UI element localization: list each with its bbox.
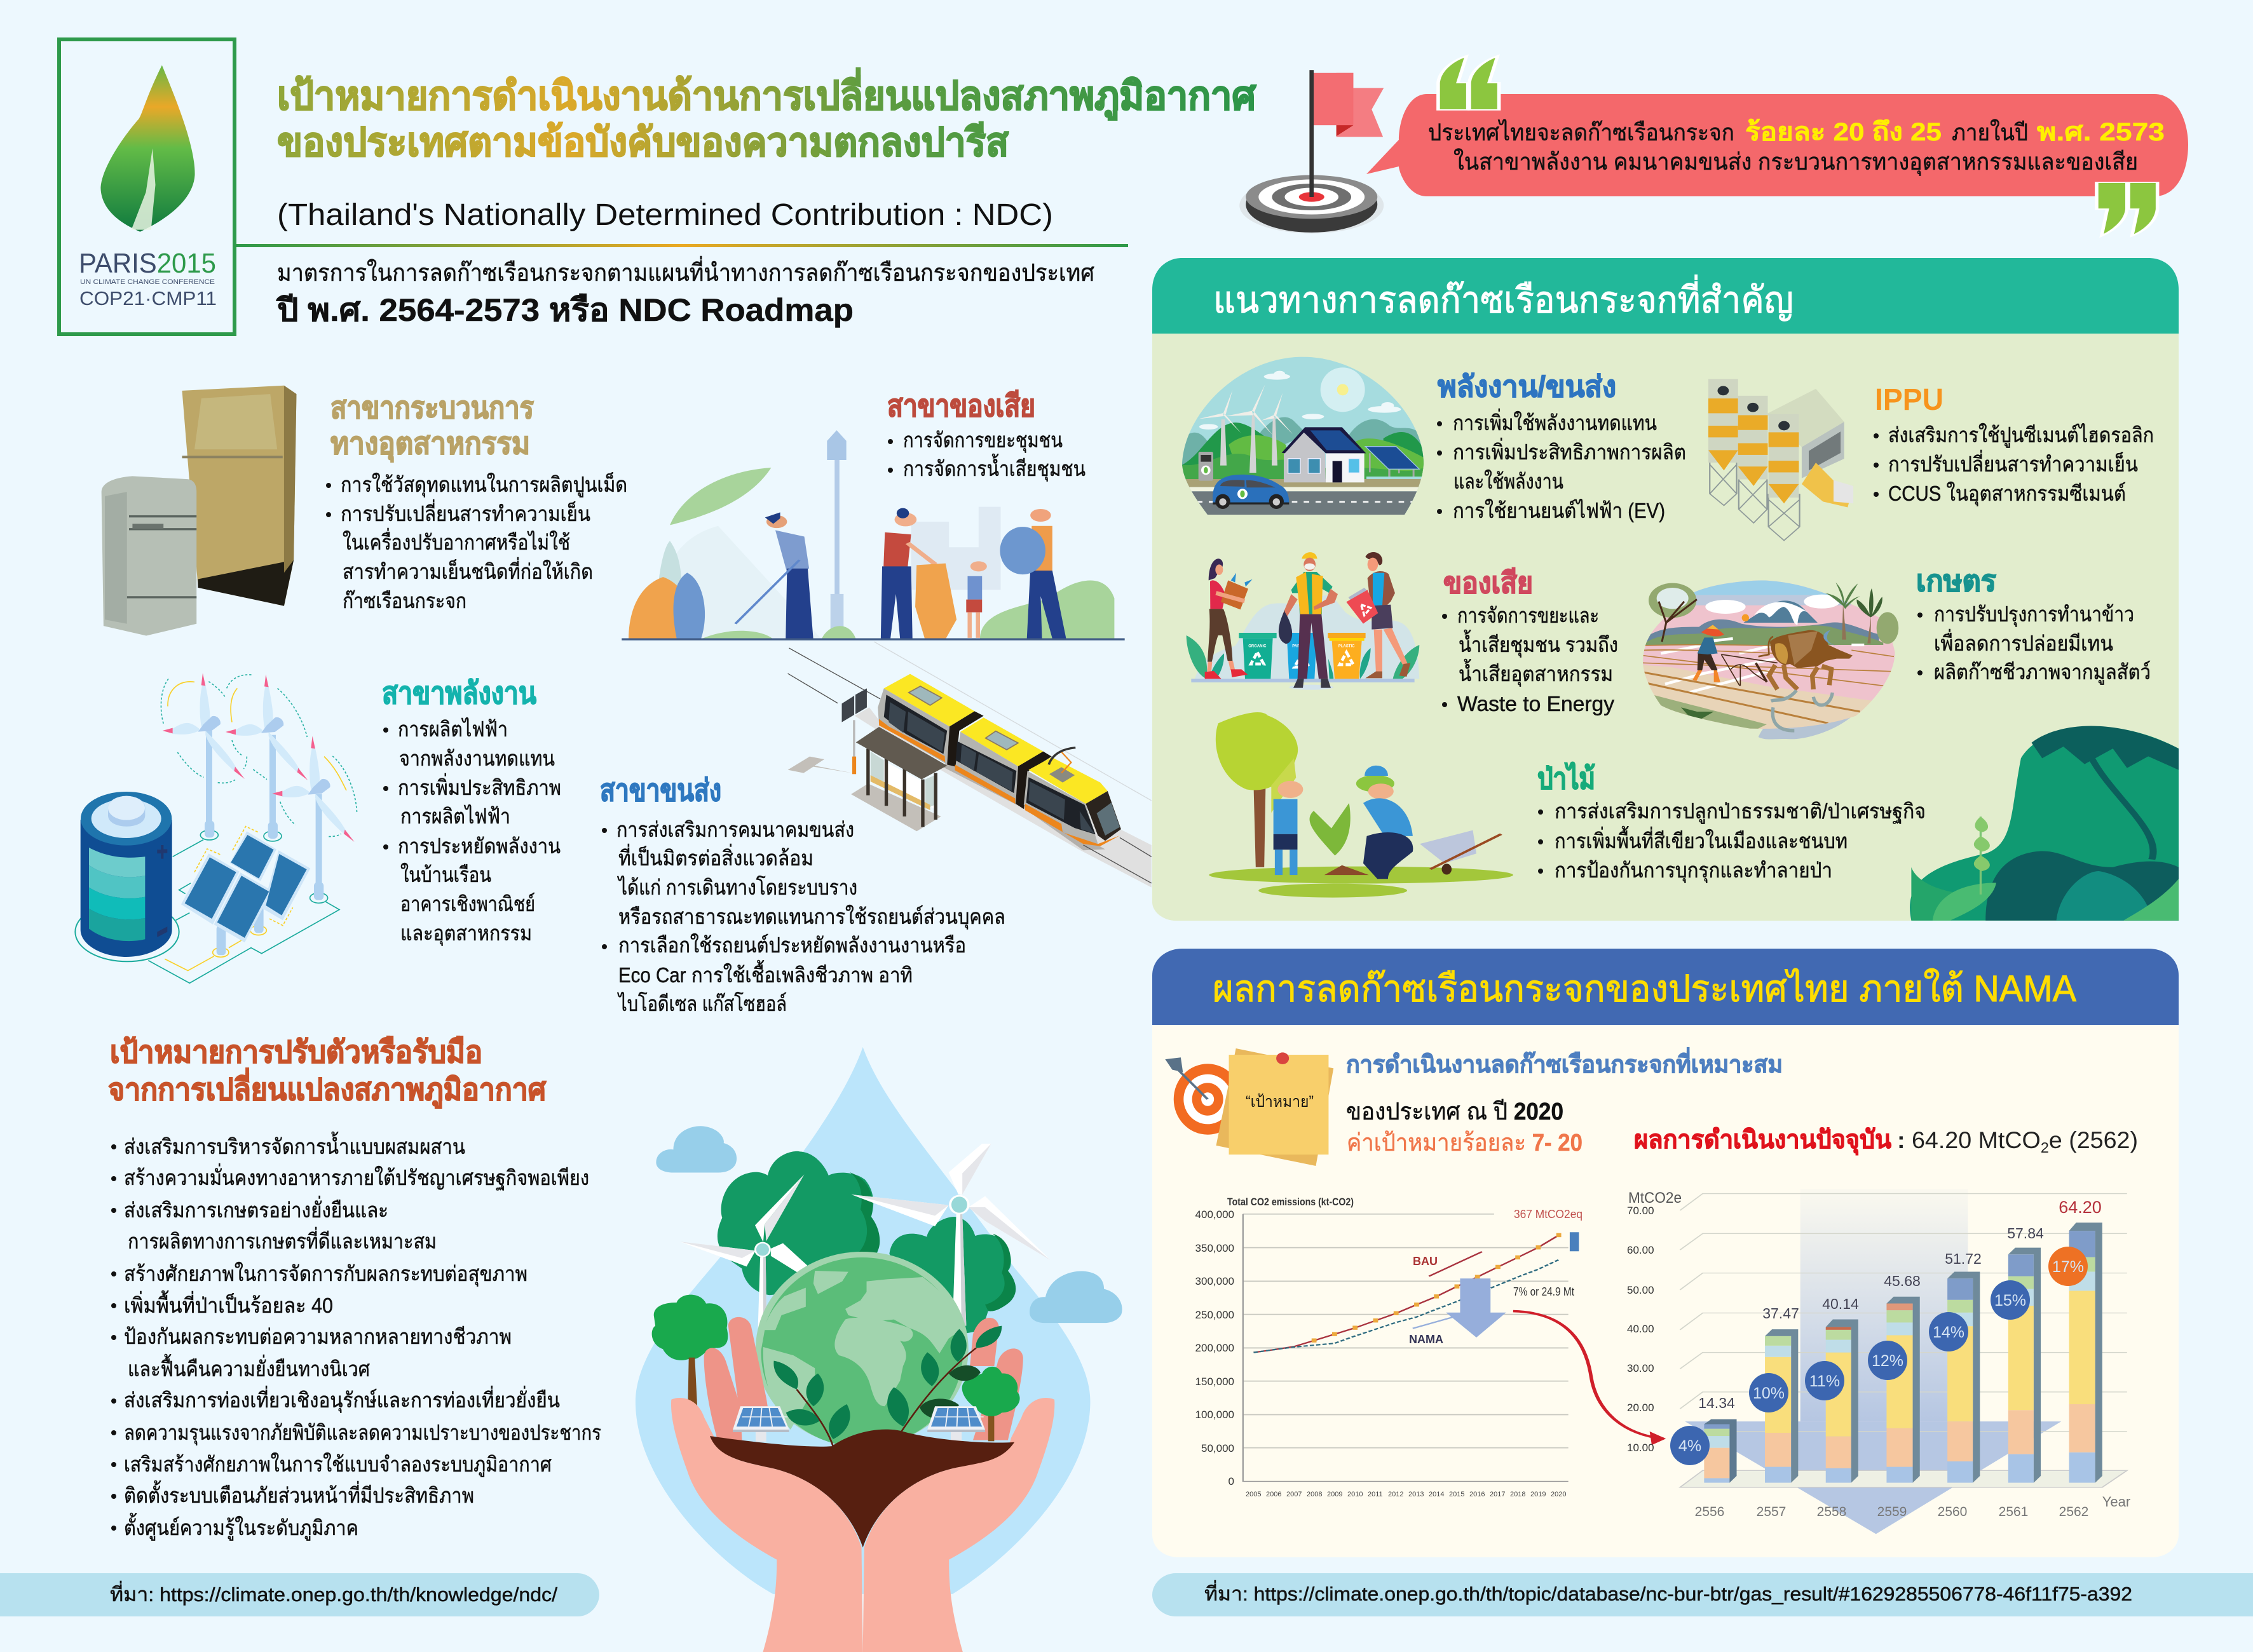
quote text — [1428, 118, 2165, 176]
axis and value labels: 40.14 — [1822, 1296, 1859, 1312]
line chart: total CO2 emissions: 367 MtCO2eq — [1514, 1208, 1583, 1221]
heading: สาขาขนส่ง — [600, 774, 721, 808]
line chart: total CO2 emissions: 250,000 — [1195, 1309, 1234, 1321]
current performance: ผลการดำเนินงานปัจจุบัน — [1634, 1126, 1891, 1156]
quote text: ในสาขาพลังงาน คมนาคมขนส่ง กระบวนการทางอุตสาหกรรมและของเสีย — [1453, 148, 2138, 176]
bullet list: การใช้ยานยนต์ไฟฟ้า (EV) — [1453, 499, 1665, 522]
axis and value labels: 51.72 — [1945, 1250, 1982, 1267]
axis and value labels: 37.47 — [1762, 1305, 1799, 1322]
bullet list: ผลิตก๊าซชีวภาพจากมูลสัตว์ — [1934, 660, 2151, 685]
line chart: total CO2 emissions: 2007 — [1286, 1491, 1302, 1498]
panel: energy — [75, 673, 561, 983]
bullet list: การส่งเสริมการคมนาคมขนส่ง — [616, 818, 854, 841]
icon: leaf with Eiffel tower — [100, 65, 195, 232]
axis and value labels: 70.00 — [1627, 1205, 1654, 1217]
heading: IPPU: IPPU — [1875, 383, 1943, 417]
line chart: total CO2 emissions: 2008 — [1307, 1491, 1322, 1498]
bullet list — [1874, 423, 2154, 506]
percent badges: 14% — [1933, 1324, 1964, 1341]
bullet list: Waste to Energy — [1457, 692, 1615, 715]
axis and value labels: 50.00 — [1627, 1284, 1654, 1296]
bullet list — [888, 428, 1086, 482]
bullet list: ส่งเสริมการเกษตรอย่างยั่งยืนและ — [124, 1196, 388, 1222]
axis and value labels: 45.68 — [1884, 1273, 1921, 1289]
bullet list: การประหยัดพลังงาน — [398, 834, 561, 858]
target text: ของประเทศ ณ ปี 2020 — [1346, 1099, 1563, 1125]
axis and value labels: 2560 — [1938, 1505, 1967, 1519]
main title — [277, 68, 1257, 165]
bullet list: ส่งเสริมการบริหารจัดการน้ำแบบผสมผสาน — [124, 1132, 465, 1158]
bullet list: น้ำเสียอุตสาหกรรม — [1459, 659, 1613, 687]
line chart: total CO2 emissions — [1195, 1196, 1666, 1498]
icon: old refrigerators — [102, 386, 296, 636]
subtitle: (Thailand's Nationally Determined Contribution : NDC) — [277, 198, 1053, 232]
axis and value labels: 2556 — [1695, 1505, 1724, 1519]
bullet list: การจัดการขยะและ — [1457, 604, 1599, 627]
target text: การดำเนินงานลดก๊าซเรือนกระจกที่เหมาะสม — [1346, 1047, 1783, 1078]
heading: สาขากระบวนการ — [330, 391, 534, 425]
bullet list: CCUS ในอุตสาหกรรมซีเมนต์ — [1888, 482, 2126, 506]
bullet list: น้ำเสียชุมชน รวมถึง — [1459, 630, 1618, 658]
bullet list — [1538, 799, 1926, 883]
bullet list: จากพลังงานทดแทน — [399, 747, 555, 770]
line chart: total CO2 emissions: 7% or 24.9 Mt — [1513, 1285, 1574, 1298]
axis and value labels: 30.00 — [1627, 1362, 1654, 1374]
illustration: farmer and buffalo in rice field — [1640, 572, 1902, 741]
panel header — [1152, 258, 2179, 334]
bullet list — [383, 717, 561, 946]
bullet list: การจัดการน้ำเสียชุมชน — [903, 454, 1086, 482]
heading: สาขาของเสีย — [887, 389, 1035, 423]
line chart: total CO2 emissions: 2006 — [1266, 1491, 1281, 1498]
quote text: ภายในปี — [1952, 119, 2028, 146]
bullet list: เสริมสร้างศักยภาพในการใช้แบบจำลองระบบภูมิอากาศ — [124, 1452, 552, 1477]
bullet list: การปรับปรุงการทำนาข้าว — [1934, 602, 2134, 627]
bullet list: การผลิตทางการเกษตรที่ดีและเหมาะสม — [128, 1227, 437, 1253]
axis and value labels: 2562 — [2059, 1505, 2088, 1519]
line chart: total CO2 emissions: 200,000 — [1195, 1342, 1234, 1354]
bullet list: ป้องกันผลกระทบต่อความหลากหลายทางชีวภาพ — [124, 1325, 512, 1348]
heading: agriculture: เกษตร — [1916, 564, 1996, 597]
bullet list: ติดตั้งระบบเตือนภัยส่วนหน้าที่มีประสิทธิภาพ — [124, 1480, 474, 1507]
bullet list: การเพิ่มใช้พลังงานทดแทน — [1453, 409, 1657, 435]
line chart: total CO2 emissions: 2005 — [1246, 1491, 1261, 1498]
bullet list: และอุตสาหกรรม — [400, 921, 532, 946]
line chart: total CO2 emissions: 2018 — [1510, 1491, 1525, 1498]
panel: key guidelines — [1152, 258, 2179, 921]
bullet list: ที่เป็นมิตรต่อสิ่งแวดล้อม — [618, 844, 813, 870]
roadmap description: มาตรการในการลดก๊าซเรือนกระจกตามแผนที่นำทางการลดก๊าซเรือนกระจกของประเทศ — [277, 256, 1094, 287]
logo: Paris 2015 COP21: UN CLIMATE CHANGE CONFERENCE — [80, 278, 215, 286]
heading: forestry: ป่าไม้ — [1537, 762, 1595, 795]
quote text: ร้อยละ 20 ถึง 25 — [1745, 118, 1942, 146]
main title: เป้าหมายการดำเนินงานด้านการเปลี่ยนแปลงสภาพภูมิอากาศ — [277, 68, 1257, 120]
line chart: total CO2 emissions: 300,000 — [1195, 1275, 1234, 1287]
bullet list — [1917, 602, 2151, 685]
illustration: tram and bus stop — [788, 642, 1152, 888]
illustration: people sorting waste: PLASTIC — [1338, 644, 1355, 648]
current performance: : 64.20 MtCO — [1897, 1127, 2038, 1153]
bullet list: ส่งเสริมการใช้ปูนซีเมนต์ไฮดรอลิก — [1888, 423, 2154, 448]
panel header — [1152, 949, 2179, 1025]
panel header: แนวทางการลดก๊าซเรือนกระจกที่สำคัญ — [1213, 274, 1794, 321]
bullet list: การเลือกใช้รถยนต์ประหยัดพลังงานงานหรือ — [618, 933, 966, 957]
bullet list — [1442, 604, 1618, 715]
heading: energy / transport: พลังงาน/ขนส่ง — [1438, 370, 1616, 403]
target text — [1346, 1047, 1783, 1156]
line chart: total CO2 emissions: 2016 — [1469, 1491, 1485, 1498]
bullet list: และฟื้นคืนความยั่งยืนทางนิเวศ — [128, 1354, 370, 1381]
bullet list: การจัดการขยะชุมชน — [903, 428, 1063, 453]
illustration: people collecting waste — [622, 430, 1125, 640]
illustration: wind turbines, battery and solar panels — [75, 673, 357, 983]
percent badges: 10% — [1753, 1385, 1785, 1402]
panel: waste — [622, 389, 1125, 640]
axis and value labels: 2557 — [1757, 1505, 1786, 1519]
bullet list — [111, 1132, 601, 1541]
line chart: total CO2 emissions: 2012 — [1388, 1491, 1403, 1498]
bullet list: การเพิ่มประสิทธิภาพการผลิต — [1453, 438, 1686, 464]
axis and value labels: 64.20 — [2059, 1198, 2102, 1217]
line chart: total CO2 emissions: 50,000 — [1201, 1442, 1234, 1454]
footer source: left: ที่มา: https://climate.onep.go.th/th/knowledge/ndc/ — [110, 1581, 557, 1606]
illustration: cement silos — [1708, 379, 1853, 541]
line chart: total CO2 emissions: NAMA — [1409, 1333, 1443, 1346]
bullet list — [326, 472, 627, 613]
bullet list: การปรับเปลี่ยนสารทำความเย็น — [341, 499, 590, 525]
axis and value labels: 2561 — [1999, 1505, 2028, 1519]
percent badges: 11% — [1809, 1372, 1840, 1390]
line chart: total CO2 emissions: 2014 — [1429, 1491, 1444, 1498]
bullet list: ในบ้านเรือน — [400, 863, 491, 886]
axis and value labels: 10.00 — [1627, 1442, 1654, 1454]
line chart: total CO2 emissions: 150,000 — [1195, 1376, 1234, 1388]
panel: industrial processes — [102, 386, 627, 636]
axis and value labels: 2559 — [1877, 1505, 1907, 1519]
bar chart: emission reductions 2556-2562 — [1627, 1189, 2130, 1534]
line chart: total CO2 emissions: 2013 — [1408, 1491, 1424, 1498]
bullet list: ไบโอดีเซล แก๊สโซฮอล์ — [617, 992, 787, 1015]
axis and value labels: 20.00 — [1627, 1402, 1654, 1414]
icon: target and sticky note — [1165, 1048, 1333, 1166]
logo: Paris 2015 COP21: PARIS2015 — [79, 248, 216, 279]
bullet list: การเพิ่มประสิทธิภาพ — [398, 773, 561, 799]
panel: transport — [600, 642, 1152, 1015]
line chart: total CO2 emissions: 100,000 — [1195, 1409, 1234, 1421]
current performance — [1634, 1126, 2138, 1156]
bullet list: เพื่อลดการปล่อยมีเทน — [1934, 629, 2113, 655]
icon: target and sticky note: “เป้าหมาย” — [1246, 1093, 1314, 1111]
illustration: forest corner — [1910, 726, 2179, 921]
panel: adaptation goals: จากการเปลี่ยนแปลงสภาพภูมิอากาศ — [108, 1067, 547, 1109]
footer source: right: ที่มา: https://climate.onep.go.th/th/topic/database/nc-bur-btr/gas_result/#1629285506778-46f11f75-a392 — [1204, 1580, 2132, 1605]
line chart: total CO2 emissions: BAU — [1413, 1255, 1438, 1268]
axis and value labels: Year — [2102, 1494, 2130, 1510]
bullet list: การใช้วัสดุทดแทนในการผลิตปูนเม็ด — [341, 472, 627, 498]
bullet list: และใช้พลังงาน — [1453, 470, 1563, 493]
bullet list: เพิ่มพื้นที่ป่าเป็นร้อยละ 40 — [124, 1290, 333, 1317]
bullet list: สร้างความมั่นคงทางอาหารภายใต้ปรัชญาเศรษฐกิจพอเพียง — [124, 1163, 589, 1191]
logo: Paris 2015 COP21 — [59, 39, 235, 334]
bullet list: การผลิตไฟฟ้า — [400, 804, 510, 828]
panel: adaptation goals — [108, 1036, 601, 1541]
panel: industrial processes: ทางอุตสาหกรรม — [330, 427, 530, 463]
footer source: right — [1152, 1573, 2253, 1616]
bullet list: Eco Car การใช้เชื้อเพลิงชีวภาพ อาทิ — [618, 960, 913, 987]
line chart: total CO2 emissions: Total CO2 emissions (kt-CO2) — [1227, 1196, 1354, 1208]
axis and value labels: MtCO2e — [1628, 1189, 1682, 1207]
illustration: planting trees — [1209, 712, 1513, 898]
bullet list: ลดความรุนแรงจากภัยพิบัติและลดความเปราะบางของประชากร — [124, 1421, 601, 1446]
bullet list: ได้แก่ การเดินทางโดยระบบราง — [616, 876, 857, 899]
illustration: hands holding earth inside water drop — [636, 1047, 1122, 1652]
quote text: ประเทศไทยจะลดก๊าซเรือนกระจก — [1428, 119, 1734, 146]
line chart: total CO2 emissions: 2015 — [1449, 1491, 1464, 1498]
bullet list: การผลิตไฟฟ้า — [398, 717, 508, 741]
illustration: people sorting waste: ORGANIC — [1248, 644, 1267, 648]
logo: Paris 2015 COP21: COP21·CMP11 — [79, 287, 217, 309]
current performance: 2 — [2041, 1139, 2049, 1156]
heading: waste: ของเสีย — [1443, 566, 1533, 599]
icon: target with flag — [1239, 70, 1384, 233]
axis and value labels: 57.84 — [2007, 1225, 2044, 1242]
bullet list — [1437, 409, 1686, 522]
bullet list: อาคารเชิงพาณิชย์ — [400, 892, 535, 916]
bus stop — [842, 688, 947, 827]
axis and value labels: 2558 — [1817, 1505, 1846, 1519]
percent badges: 12% — [1872, 1352, 1903, 1370]
line chart: total CO2 emissions: 0 — [1229, 1475, 1234, 1487]
percent badges: 4% — [1678, 1437, 1701, 1455]
bullet list: ก๊าซเรือนกระจก — [343, 589, 466, 613]
heading: สาขาพลังงาน — [382, 677, 536, 710]
roadmap description: ปี พ.ศ. 2564-2573 หรือ NDC Roadmap — [276, 292, 854, 328]
line chart: total CO2 emissions: 2009 — [1327, 1491, 1342, 1498]
percent badges — [1670, 1247, 2088, 1465]
bullet list: ตั้งศูนย์ความรู้ในระดับภูมิภาค — [124, 1513, 358, 1541]
main title: ของประเทศตามข้อบังคับของความตกลงปารีส — [277, 121, 1009, 165]
bullet list — [602, 818, 1005, 1015]
bullet list: การป้องกันการบุกรุกและทำลายป่า — [1555, 858, 1832, 883]
panel header: ผลการลดก๊าซเรือนกระจกของประเทศไทย ภายใต้ NAMA — [1213, 968, 2076, 1010]
bullet list: สารทำความเย็นชนิดที่ก่อให้เกิด — [343, 557, 593, 583]
line chart: total CO2 emissions: 2011 — [1368, 1491, 1383, 1498]
illustration: renewable house and EV — [1182, 357, 1424, 515]
axis and value labels: 60.00 — [1627, 1244, 1654, 1256]
current performance: e (2562) — [2049, 1127, 2138, 1153]
line chart: total CO2 emissions: 350,000 — [1195, 1242, 1234, 1254]
bullet list: การปรับเปลี่ยนสารทำความเย็น — [1888, 450, 2138, 476]
icon: opening quote — [1438, 56, 1499, 110]
percent badges: 15% — [1994, 1292, 2026, 1310]
icon: closing quote — [2097, 182, 2158, 236]
bullet list: ส่งเสริมการท่องเที่ยวเชิงอนุรักษ์และการท่องเที่ยวยั่งยืน — [124, 1386, 560, 1413]
axis and value labels — [1627, 1189, 2130, 1519]
illustration: people sorting waste — [1187, 552, 1419, 690]
axis and value labels: 14.34 — [1698, 1395, 1735, 1411]
bullet list: การส่งเสริมการปลูกป่าธรรมชาติ/ป่าเศรษฐกิจ — [1555, 799, 1926, 824]
line chart: total CO2 emissions: 2017 — [1490, 1491, 1505, 1498]
illustration: people sorting waste: PAPER — [1292, 644, 1305, 648]
axis and value labels: 40.00 — [1627, 1323, 1654, 1335]
roadmap description — [276, 256, 1094, 328]
percent badges: 17% — [2052, 1258, 2084, 1276]
quote text: พ.ศ. 2573 — [2037, 118, 2165, 146]
line chart: total CO2 emissions: 2020 — [1551, 1491, 1566, 1498]
bullet list: การเพิ่มพื้นที่สีเขียวในเมืองและชนบท — [1555, 826, 1848, 853]
line chart: total CO2 emissions: 2010 — [1347, 1491, 1363, 1498]
bullet list: ในเครื่องปรับอากาศหรือไม่ใช้ — [343, 528, 570, 554]
car bodies — [878, 674, 1121, 846]
footer source: left — [0, 1573, 599, 1616]
target text: ค่าเป้าหมายร้อยละ 7- 20 — [1347, 1130, 1583, 1156]
heading: เป้าหมายการปรับตัวหรือรับมือ — [110, 1036, 482, 1069]
panel: NAMA results — [1152, 949, 2179, 1557]
bullet list: สร้างศักยภาพในการจัดการกับผลกระทบต่อสุขภาพ — [124, 1262, 528, 1287]
quote bubble — [1366, 56, 2188, 236]
line chart: total CO2 emissions: 2019 — [1530, 1491, 1546, 1498]
line chart: total CO2 emissions: 400,000 — [1195, 1209, 1234, 1221]
bullet list: หรือรถสาธารณะทดแทนการใช้รถยนต์ส่วนบุคคล — [618, 905, 1005, 930]
